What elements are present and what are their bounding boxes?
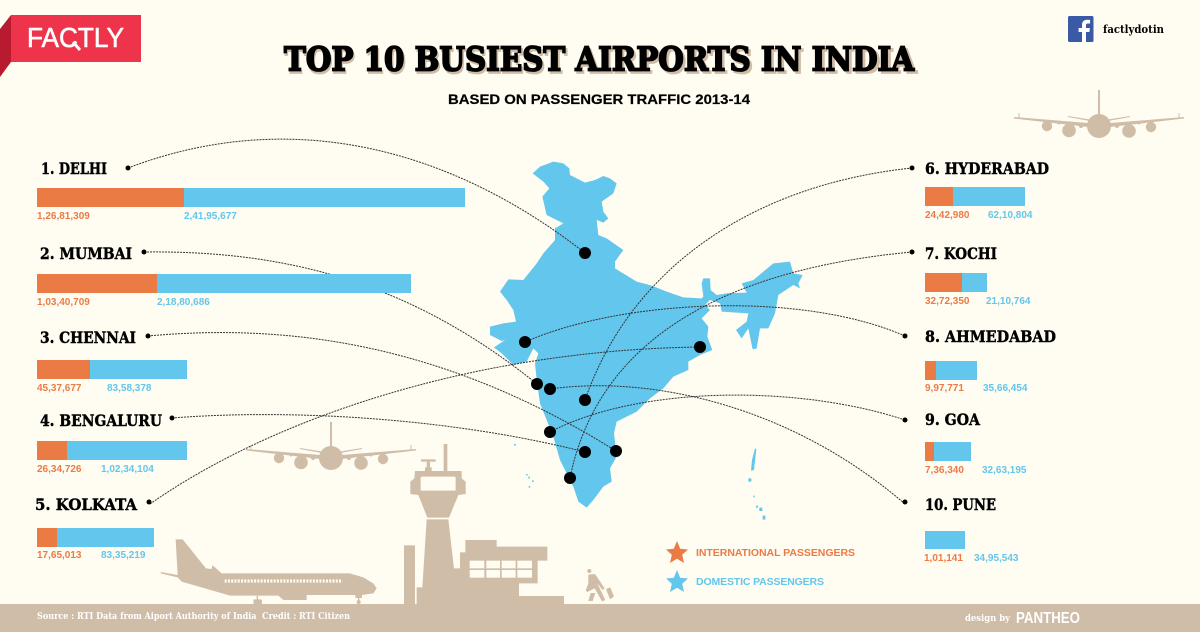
- panel: 10 Pune: [924, 495, 1019, 564]
- icon: airplane front view, centre left: [246, 422, 416, 470]
- source and credit: Source : RTI Data from Aiport Authority of India Credit : RTI Citizen: [37, 612, 350, 622]
- panel: 6 Hyderabad: [925, 159, 1049, 221]
- panel: 6 Hyderabad: 6. HYDERABAD: [925, 159, 1049, 178]
- subtitle: BASED ON PASSENGER TRAFFIC 2013-14: [448, 92, 751, 107]
- panel: 7 Kochi: [925, 244, 1031, 307]
- title: TOP 10 BUSIEST AIRPORTS IN INDIA: [285, 42, 917, 81]
- social: Facebook handle: factlydotin: [1103, 23, 1164, 36]
- title: TOP 10 BUSIEST AIRPORTS IN INDIA: [284, 40, 914, 78]
- legend: DOMESTIC PASSENGERS: [696, 576, 824, 588]
- panel: 2 Mumbai: 2,18,80,686: [157, 297, 210, 308]
- panel: 8 Ahmedabad: 35,66,454: [983, 383, 1028, 394]
- design credit: PANTHEO: [1016, 610, 1080, 627]
- panel: 9 Goa: 32,63,195: [982, 465, 1027, 476]
- logo: Factly ribbon: [0, 15, 141, 77]
- panel: 6 Hyderabad: 62,10,804: [988, 210, 1033, 221]
- panel: 3 Chennai: 45,37,677: [37, 383, 82, 394]
- panel: 2 Mumbai: 1,03,40,709: [37, 297, 90, 308]
- panel: 3 Chennai: 83,58,378: [107, 383, 152, 394]
- panel: 8 Ahmedabad: 9,97,771: [925, 383, 964, 394]
- connector lines from cities to airports: [128, 139, 912, 504]
- city markers on map: [519, 247, 706, 484]
- panel: 4 Bengaluru: 1,02,34,104: [101, 464, 154, 475]
- panel: 9 Goa: 9. GOA: [925, 410, 981, 429]
- panel: 9 Goa: [925, 410, 1027, 476]
- panel: 1 Delhi: [37, 159, 465, 222]
- panel: 10 Pune: 34,95,543: [974, 553, 1019, 564]
- panel: 2 Mumbai: 2. MUMBAI: [40, 244, 132, 263]
- panel: 7 Kochi: 32,72,350: [925, 296, 970, 307]
- logo: Factly ribbon: FACTLY: [27, 22, 124, 53]
- panel: 1 Delhi: 1,26,81,309: [37, 211, 90, 222]
- illustration: airport skyline: [161, 444, 614, 605]
- design credit: [965, 610, 1080, 627]
- panel: 6 Hyderabad: 24,42,980: [925, 210, 970, 221]
- panel: 4 Bengaluru: 26,34,726: [37, 464, 82, 475]
- panel: 1 Delhi: 2,41,95,677: [184, 211, 237, 222]
- panel: 8 Ahmedabad: [925, 327, 1056, 394]
- map of India: [490, 162, 803, 520]
- panel: 2 Mumbai: [37, 244, 411, 308]
- legend: [666, 541, 855, 592]
- panel: 5 Kolkata: 17,65,013: [37, 550, 82, 561]
- panel: 10 Pune: 10. PUNE: [925, 495, 996, 514]
- panel: 5 Kolkata: 5. KOLKATA: [35, 495, 138, 514]
- panel: 7 Kochi: 21,10,764: [986, 296, 1031, 307]
- control tower and terminal: [404, 444, 564, 605]
- panel: 7 Kochi: 7. KOCHI: [925, 244, 997, 263]
- design credit: design by: [965, 613, 1010, 624]
- icon: traveller with luggage: [586, 569, 614, 601]
- panel: 5 Kolkata: [35, 495, 154, 561]
- panel: 5 Kolkata: 83,35,219: [101, 550, 146, 561]
- footer band: [0, 604, 1200, 632]
- legend: INTERNATIONAL PASSENGERS: [696, 547, 855, 559]
- social: Facebook handle: [1068, 16, 1164, 42]
- panel: 8 Ahmedabad: 8. AHMEDABAD: [925, 327, 1056, 346]
- airplane side view: [161, 539, 377, 604]
- panel: 3 Chennai: [37, 328, 187, 394]
- panel: 3 Chennai: 3. CHENNAI: [40, 328, 136, 347]
- icon: airplane front view, top right: [1014, 90, 1184, 138]
- panel: 9 Goa: 7,36,340: [925, 465, 964, 476]
- panel: 10 Pune: 1,01,141: [924, 553, 963, 564]
- panel: 4 Bengaluru: 4. BENGALURU: [40, 411, 162, 430]
- panel: 4 Bengaluru: [37, 411, 187, 475]
- panel: 1 Delhi: 1. DELHI: [41, 159, 107, 178]
- line start dots: [126, 166, 914, 504]
